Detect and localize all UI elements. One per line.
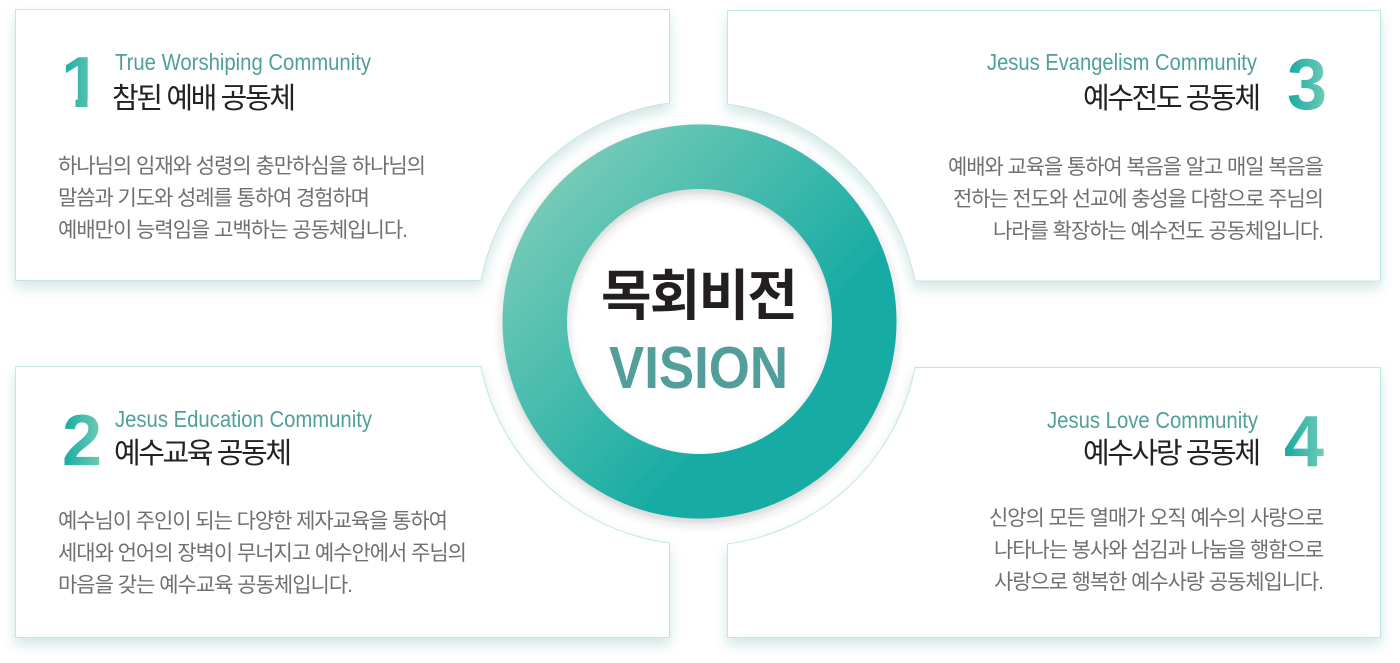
number 4: 4 [1284,402,1324,482]
description 2: 예수님이 주인이 되는 다양한 제자교육을 통하여 [58,510,448,533]
description 2: 세대와 언어의 장벽이 무너지고 예수안에서 주님의 [58,542,467,565]
english heading 1: True Worshiping Community [115,49,371,75]
korean heading 4: 예수사랑 공동체 [1083,438,1261,470]
description 3 [948,156,1324,243]
description 1: 예배만이 능력임을 고백하는 공동체입니다. [58,219,408,242]
korean heading 2: 예수교육 공동체 [114,438,292,470]
description 2: 마음을 갖는 예수교육 공동체입니다. [58,574,353,597]
description 1: 말씀과 기도와 성례를 통하여 경험하며 [58,187,370,210]
description 3: 나라를 확장하는 예수전도 공동체입니다. [993,220,1324,243]
number 1: 1 [61,43,101,123]
description 1: 하나님의 임재와 성령의 충만하심을 하나님의 [58,155,426,178]
description 3: 예배와 교육을 통하여 복음을 알고 매일 복음을 [948,156,1324,179]
number 2: 2 [62,401,102,481]
description 4: 사랑으로 행복한 예수사랑 공동체입니다. [994,571,1324,594]
panel: jesus love community [728,368,1380,638]
description 4: 신앙의 모든 열매가 오직 예수의 사랑으로 [989,507,1324,530]
korean heading 1: 참된 예배 공동체 [112,83,296,115]
number 3: 3 [1287,45,1327,125]
description 4 [989,507,1324,594]
english heading 3: Jesus Evangelism Community [987,49,1257,75]
description 1 [58,155,426,242]
panel: jesus evangelism community [728,10,1380,281]
center title english: VISION [609,335,788,401]
center vision ring [502,124,896,519]
panel: jesus education community [16,366,670,638]
korean heading 3: 예수전도 공동체 [1083,83,1261,115]
description 4: 나타나는 봉사와 섬김과 나눔을 행함으로 [994,539,1324,562]
description 2 [58,510,467,597]
panel: true worshiping community [16,10,670,280]
english heading 4: Jesus Love Community [1047,407,1258,433]
center title korean: 목회비전 [601,265,798,327]
english heading 2: Jesus Education Community [115,406,372,432]
description 3: 전하는 전도와 선교에 충성을 다함으로 주님의 [953,188,1324,211]
